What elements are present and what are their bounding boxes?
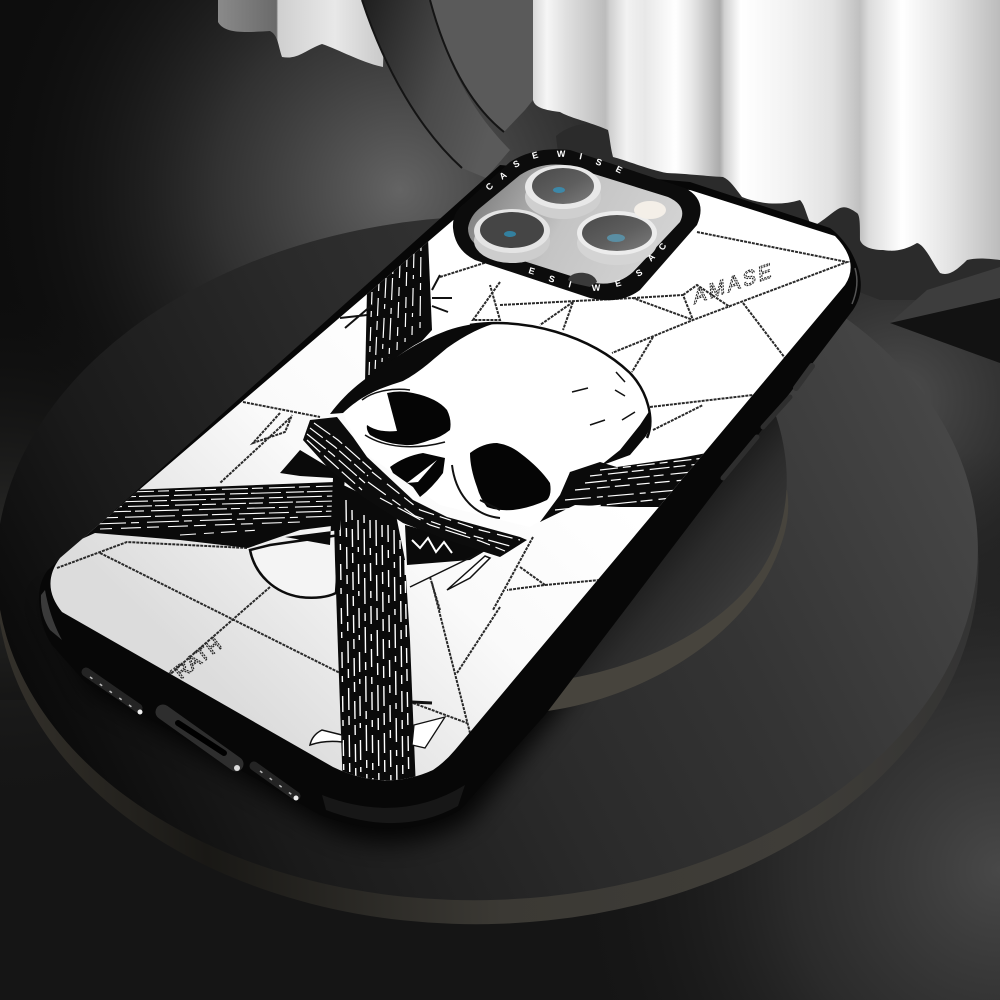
tuft at right stick	[540, 462, 620, 522]
screen artwork	[50, 190, 851, 780]
right temple shading	[604, 412, 650, 464]
hair tuft	[330, 322, 500, 414]
twig right	[412, 702, 432, 703]
horizontal stick left	[75, 482, 340, 548]
leaf left	[310, 730, 342, 745]
nose	[390, 453, 445, 497]
lens right	[577, 211, 657, 265]
jaw mass left	[280, 450, 345, 545]
stylised lettering top: AMASE	[693, 259, 775, 309]
lens top	[525, 165, 601, 219]
stylised lettering bottom: KRATH	[160, 634, 227, 692]
eye socket right	[470, 443, 551, 510]
side buttons	[723, 366, 812, 478]
case highlight left corner	[41, 590, 62, 640]
disc rim	[540, 490, 788, 712]
sensor	[568, 273, 597, 287]
right dark wedge	[890, 267, 1000, 363]
upper disc	[540, 370, 788, 712]
lower vertical stick	[310, 480, 445, 790]
camera module	[453, 149, 701, 300]
arch stand	[362, 0, 533, 178]
skull	[280, 322, 650, 590]
horizontal stick right	[540, 452, 712, 522]
spike	[447, 556, 490, 590]
eye socket left	[367, 392, 451, 445]
lower disc	[0, 199, 990, 941]
flash	[634, 201, 666, 219]
brand text top: CASEWISE	[484, 149, 624, 192]
bottom ports	[86, 672, 298, 800]
speaker left	[86, 672, 138, 708]
case sheen bottom corner	[322, 785, 465, 823]
brand text bottom: CASEWISE	[527, 241, 669, 293]
charging port	[163, 712, 236, 764]
disc surface	[0, 199, 990, 917]
disc rim	[0, 207, 990, 941]
curtain left	[218, 0, 385, 67]
speaker right	[254, 766, 296, 796]
jaw mass centre	[405, 525, 490, 565]
wrapped band	[303, 417, 527, 557]
phone shadow	[46, 480, 720, 843]
leaf right	[412, 717, 445, 748]
web lines	[57, 232, 847, 733]
dark floor under curtain	[556, 124, 1000, 300]
camera glass	[468, 164, 682, 284]
curtain right	[533, 0, 1000, 274]
phone case body	[39, 165, 861, 829]
upper vertical stick	[340, 238, 452, 382]
disc surface	[560, 370, 787, 680]
left skull rear dome	[250, 535, 340, 598]
lens left	[474, 209, 550, 263]
camera ring	[453, 149, 701, 300]
